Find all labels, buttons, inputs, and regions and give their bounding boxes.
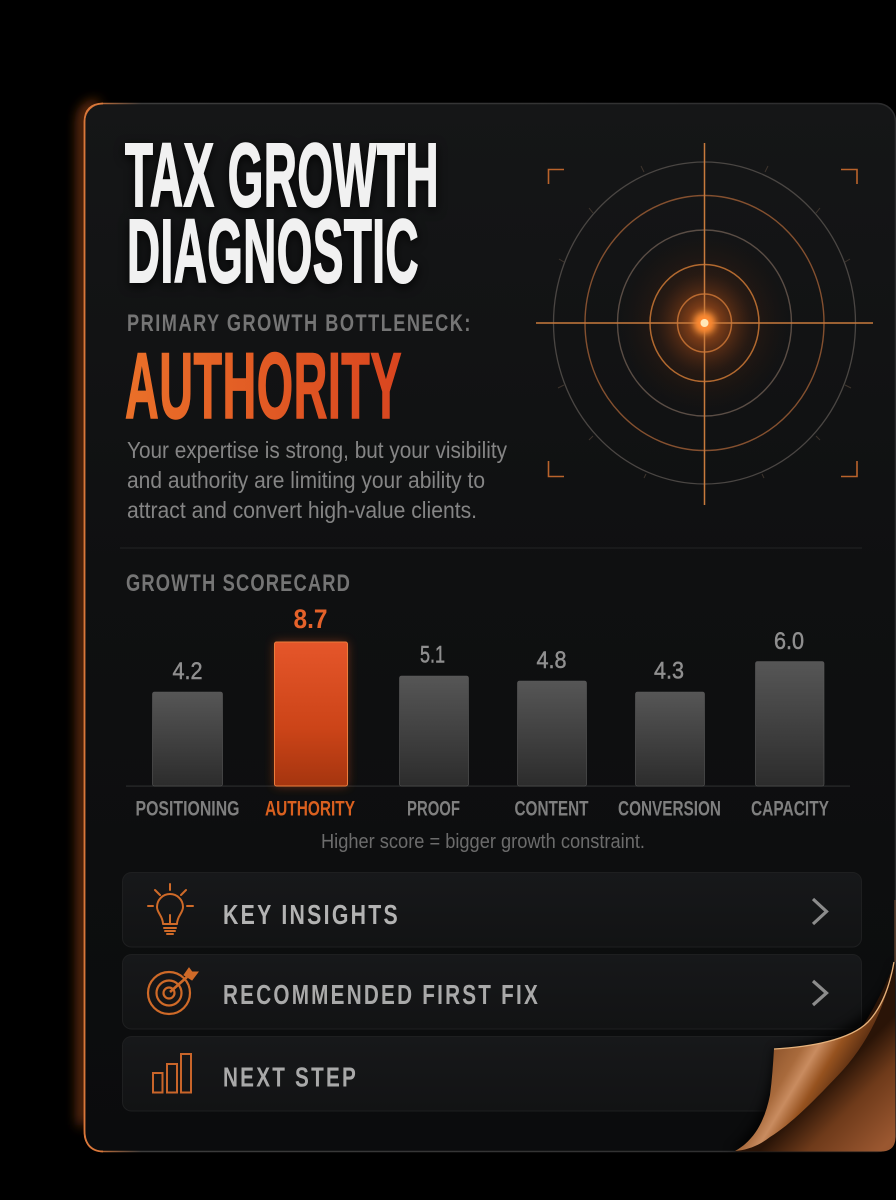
title: DIAGNOSTIC <box>127 202 419 302</box>
bar: authority 8.7: 8.7 <box>294 604 328 634</box>
bar: content 4.8: 4.8 <box>536 647 566 674</box>
heading: growth scorecard: GROWTH SCORECARD <box>126 570 351 597</box>
bar: conversion 4.3: 4.3 <box>654 658 684 684</box>
icon: chevron <box>813 981 826 1005</box>
bar: authority 8.7 <box>265 604 355 820</box>
panel: recommended first fix row: RECOMMENDED FIRST FIX <box>223 979 540 1010</box>
bar: proof 5.1: 5.1 <box>420 642 445 668</box>
bar: conversion 4.3: CONVERSION <box>618 798 721 820</box>
icon: light bulb <box>148 884 193 934</box>
description text: Your expertise is strong, but your visibility <box>127 437 507 463</box>
description text <box>127 437 507 523</box>
panel: key insights row: KEY INSIGHTS <box>223 899 400 930</box>
icon: target with arrow <box>148 968 198 1014</box>
bar: positioning 4.2 <box>136 658 240 820</box>
panel: next step row: NEXT STEP <box>223 1062 358 1092</box>
bar chart: growth scorecard <box>126 604 850 820</box>
chart note: Higher score = bigger growth constraint. <box>321 831 645 853</box>
bar: proof 5.1: PROOF <box>407 798 460 820</box>
bar: content 4.8 <box>514 647 589 820</box>
bar: content 4.8: CONTENT <box>514 798 589 820</box>
icon: chevron <box>813 899 826 924</box>
bar: capacity 6.0 <box>751 628 829 820</box>
bar: proof 5.1 <box>400 642 468 820</box>
bar: authority 8.7: AUTHORITY <box>265 798 355 820</box>
icon: target reticle <box>536 143 873 505</box>
title: TAX GROWTH <box>125 126 439 226</box>
bar: capacity 6.0: 6.0 <box>774 628 804 655</box>
page curl <box>730 900 896 1152</box>
description text: and authority are limiting your ability to <box>127 467 485 493</box>
bar: capacity 6.0: CAPACITY <box>751 798 829 820</box>
bar: conversion 4.3 <box>618 658 721 820</box>
bar: positioning 4.2: POSITIONING <box>136 798 240 820</box>
subheading: primary growth bottleneck: PRIMARY GROWTH BOTTLENECK: <box>127 310 472 337</box>
panel: key insights row <box>122 872 862 947</box>
panel: recommended first fix row <box>122 954 862 1029</box>
panel: next step row <box>122 1036 862 1111</box>
bar: positioning 4.2: 4.2 <box>172 658 202 685</box>
description text: attract and convert high-value clients. <box>127 497 477 523</box>
text: AUTHORITY <box>125 333 402 438</box>
panel: diagnostic card <box>82 104 896 1152</box>
divider <box>120 548 862 549</box>
icon: rising bars <box>153 1054 191 1092</box>
title <box>125 126 439 302</box>
